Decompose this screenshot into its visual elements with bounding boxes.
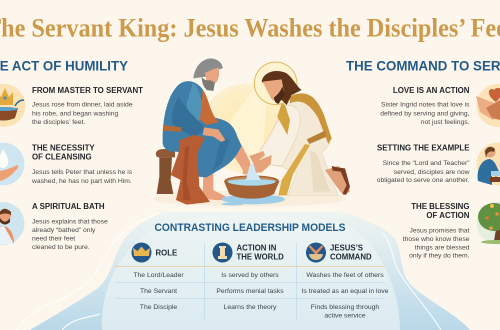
Peter: head bbox=[193, 58, 223, 91]
item body: Sister Ingrid notes that love is bbox=[381, 102, 470, 108]
Jesus: sandal foot bbox=[325, 166, 350, 195]
item body: not just feelings. bbox=[421, 119, 470, 126]
item title: SETTING THE EXAMPLE bbox=[377, 144, 470, 152]
icon: fruit tree bbox=[476, 202, 500, 244]
row: the lord/leader bbox=[133, 272, 384, 279]
illustration: Jesus washing feet bbox=[153, 58, 350, 207]
icon: joined hands and heart bbox=[476, 84, 500, 127]
table grid bbox=[115, 243, 385, 320]
water stream bbox=[246, 160, 261, 180]
panel: right item 3 bbox=[403, 202, 500, 260]
panel: right item 2 bbox=[377, 142, 500, 186]
row: the lord/leader: Washes the feet of others bbox=[306, 272, 384, 279]
column head: action in the world: ACTION IN bbox=[236, 244, 277, 252]
column icon: hands over basin bbox=[306, 242, 326, 262]
item title line 2: OF ACTION bbox=[426, 211, 470, 220]
Peter: orange cloak bbox=[171, 89, 219, 205]
row: the lord/leader: Is served by others bbox=[221, 272, 279, 279]
icon: man bathing bbox=[0, 202, 24, 245]
row: the servant: Performs menial tasks bbox=[216, 288, 284, 295]
icon: crown and basin bbox=[0, 84, 26, 127]
row: the servant bbox=[140, 288, 389, 295]
item body: Jesus tells Peter that unless he is bbox=[32, 169, 133, 176]
glow behind figures bbox=[202, 83, 292, 173]
Jesus: gold sash bbox=[277, 93, 332, 195]
item title line 2: OF CLEANSING bbox=[32, 152, 92, 162]
row: the lord/leader: The Lord/Leader bbox=[133, 272, 184, 279]
item body: defined by serving and giving, bbox=[380, 110, 470, 117]
Jesus: halo bbox=[254, 62, 297, 105]
column head: jesus's command: COMMAND bbox=[330, 252, 372, 262]
column icon: pillar bbox=[212, 242, 232, 262]
water splash pool bbox=[222, 194, 285, 204]
item title: A SPIRITUAL BATH bbox=[32, 202, 105, 211]
item body: things are blessed bbox=[415, 244, 470, 252]
icon: man serving at basin bbox=[476, 142, 500, 186]
Peter: legs and foot bbox=[203, 145, 256, 200]
icon: water drop over hand bbox=[0, 142, 24, 186]
background wave: blue flowing shape bbox=[17, 212, 470, 330]
item body: his robe, and began washing bbox=[32, 110, 119, 117]
panel: right item 1 bbox=[380, 84, 500, 127]
item body: those who know these bbox=[403, 236, 470, 243]
item body: the disciples’ feet. bbox=[32, 119, 86, 126]
stool bbox=[156, 149, 175, 194]
panel: left item 2 bbox=[0, 142, 133, 186]
column head: jesus's command: JESUS’S bbox=[330, 244, 363, 252]
row: the disciple bbox=[140, 304, 379, 320]
column head: role: ROLE bbox=[156, 248, 177, 258]
row: the disciple: active service bbox=[324, 312, 366, 320]
row: the servant: Is treated as an equal in love bbox=[302, 288, 389, 295]
Jesus: white robe bbox=[260, 97, 338, 195]
item body: obligated to serve one another. bbox=[377, 177, 470, 184]
item body: washed, he has no part with Him. bbox=[31, 178, 132, 185]
item title: LOVE IS AN ACTION bbox=[393, 86, 470, 95]
item title: FROM MASTER TO SERVANT bbox=[32, 86, 143, 95]
table heading: CONTRASTING LEADERSHIP MODELS bbox=[154, 222, 346, 234]
item title: THE NECESSITY bbox=[32, 144, 95, 152]
item body: Jesus explains that those bbox=[32, 218, 108, 226]
Peter: blue robe bbox=[163, 81, 242, 177]
item title: THE BLESSING bbox=[411, 202, 470, 211]
column icon: crown bbox=[132, 242, 152, 262]
item body: Jesus rose from dinner, laid aside bbox=[32, 102, 133, 108]
row: the disciple: The Disciple bbox=[140, 304, 177, 311]
item body: served, disciples are now bbox=[394, 169, 470, 176]
item body: cleaned to be pure. bbox=[32, 244, 90, 251]
item body: only if they do them. bbox=[409, 252, 470, 260]
item body: Since the “Lord and Teacher” bbox=[383, 160, 470, 167]
item body: need their feet bbox=[32, 236, 75, 243]
item body: already “bathed” only bbox=[32, 227, 96, 234]
row: the disciple: Learns the theory bbox=[224, 304, 277, 311]
panel: left item 3 bbox=[0, 202, 108, 251]
row: the disciple: Finds blessing through bbox=[311, 304, 379, 311]
Peter: hand bbox=[203, 127, 225, 142]
Jesus: head and hair bbox=[262, 71, 302, 105]
item body: Jesus promises that bbox=[409, 228, 470, 234]
table: contrasting leadership models bbox=[115, 222, 389, 320]
row: the servant: The Servant bbox=[140, 288, 177, 295]
panel: left item 1 bbox=[0, 84, 143, 127]
Jesus: hands bbox=[249, 151, 272, 173]
column head: action in the world: THE WORLD bbox=[236, 252, 284, 262]
basin bbox=[224, 175, 279, 199]
floor shadow bbox=[153, 191, 347, 207]
